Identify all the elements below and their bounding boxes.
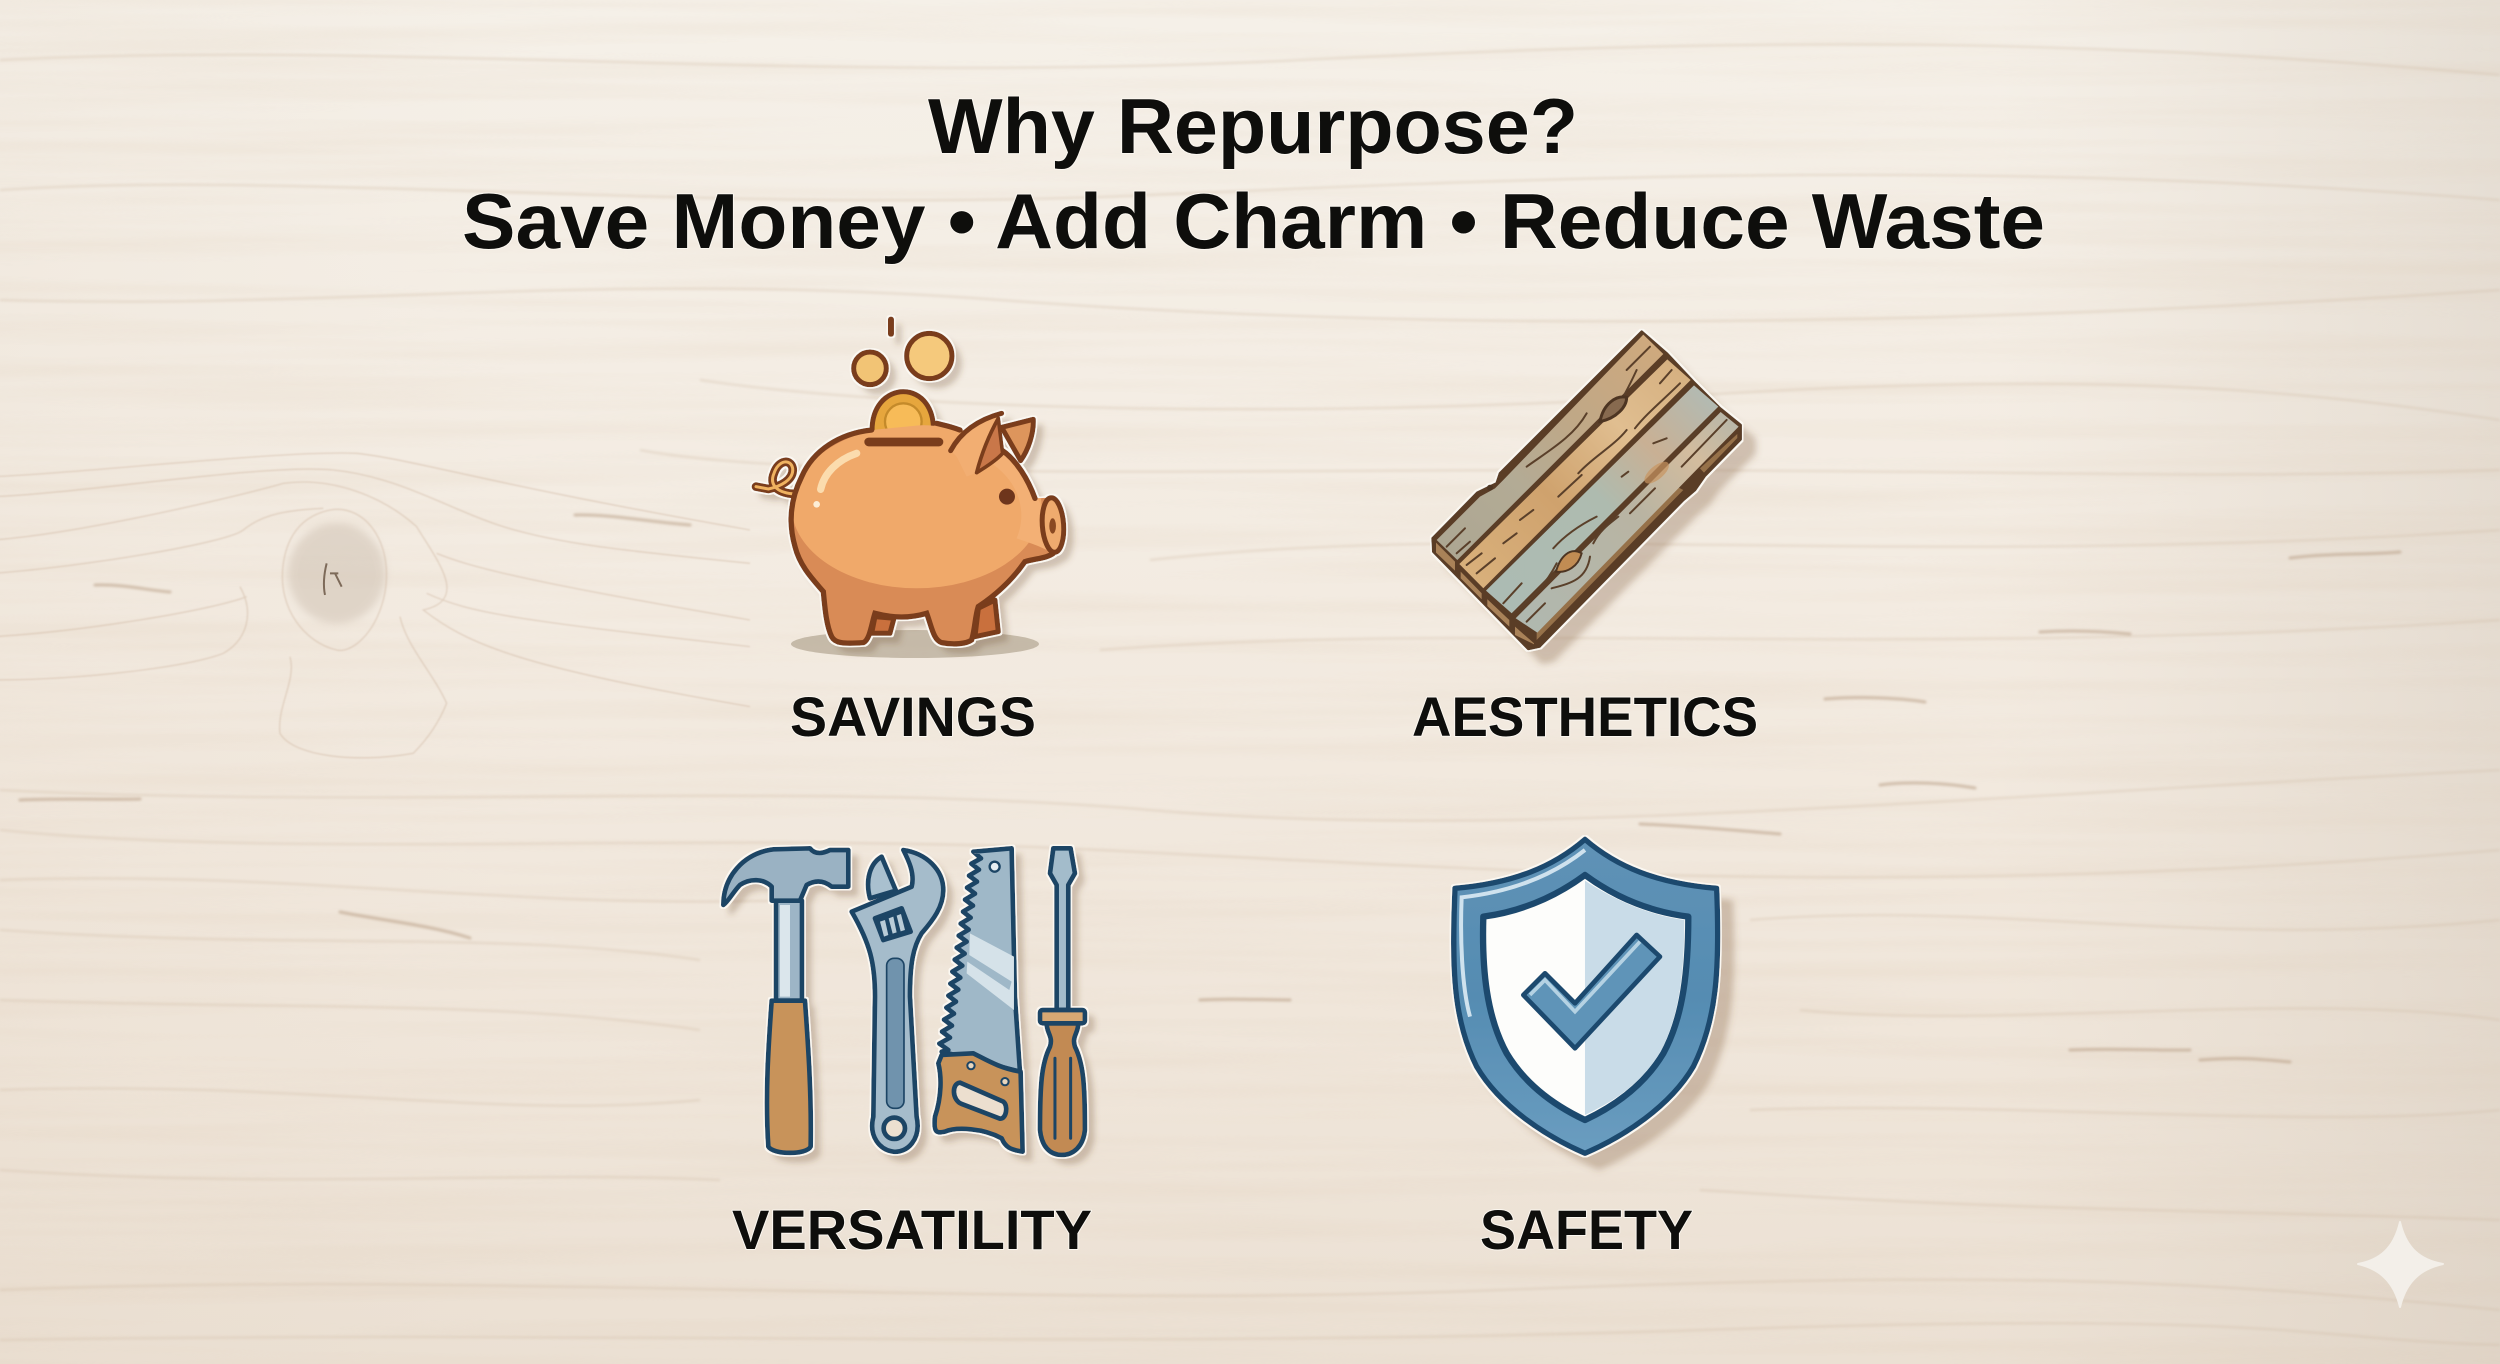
- slot: [864, 438, 943, 446]
- saw: [935, 848, 1023, 1152]
- label: aesthetics: AESTHETICS: [1412, 685, 1758, 748]
- hammer: [723, 848, 848, 1153]
- falling coin tick: [888, 317, 894, 337]
- panel: aesthetics: [1412, 332, 1758, 748]
- title line 1: Why Repurpose?: [928, 82, 1578, 170]
- shield rim: [1454, 839, 1718, 1153]
- coin in slot: [872, 392, 933, 440]
- grain: [1447, 347, 1727, 622]
- snout: [1040, 497, 1066, 553]
- highlights: [821, 453, 857, 489]
- plank 2: [1459, 359, 1691, 588]
- icon: sparkle watermark: [2358, 1222, 2443, 1307]
- wrench: [852, 850, 943, 1152]
- body: [791, 423, 1053, 644]
- shield face right: [1585, 881, 1684, 1115]
- large coin: [907, 333, 952, 379]
- icon: reclaimed wood planks: [1433, 332, 1741, 649]
- back legs: [872, 600, 998, 637]
- rim highlight: [1461, 850, 1585, 1017]
- chip in edge: [1487, 485, 1493, 491]
- tail: [756, 462, 795, 494]
- panel: safety: [1454, 839, 1718, 1261]
- wood knot: [0, 453, 750, 758]
- eye: [999, 489, 1015, 505]
- plank 1: [1437, 335, 1663, 560]
- side faces: [1436, 543, 1534, 644]
- small coin: [854, 352, 886, 385]
- label: savings: SAVINGS: [790, 685, 1036, 748]
- back ear: [1002, 419, 1033, 461]
- icon: piggy bank with coins: [756, 317, 1066, 658]
- plank 3: [1486, 385, 1718, 613]
- check mark: [1523, 935, 1660, 1048]
- panel: savings: [756, 317, 1066, 748]
- knots: [1600, 397, 1627, 422]
- title line 2: Save Money • Add Charm • Reduce Waste: [462, 177, 2045, 265]
- screwdriver: [1040, 848, 1085, 1155]
- label: safety: SAFETY: [1480, 1198, 1693, 1261]
- icon: tool set: [723, 848, 1085, 1155]
- plank 4: [1516, 412, 1739, 633]
- icon: shield with check mark: [1454, 839, 1718, 1153]
- shield face left: [1483, 875, 1688, 1120]
- label: versatility: VERSATILITY: [732, 1198, 1092, 1261]
- front ear: [951, 413, 1002, 477]
- plank silhouette: [1433, 332, 1741, 649]
- title: [462, 82, 2045, 265]
- panel: versatility: [723, 848, 1092, 1261]
